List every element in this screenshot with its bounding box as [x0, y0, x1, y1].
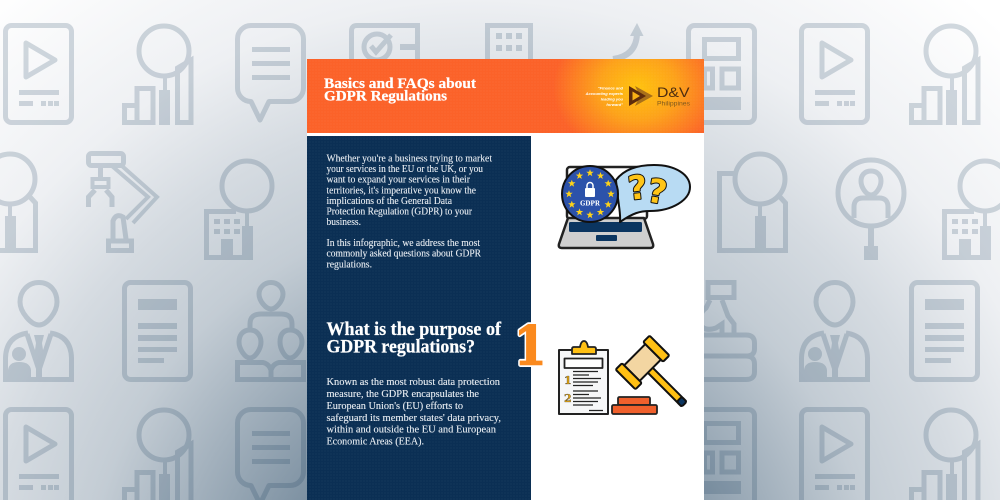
heading: question 1: GDPR regulations?	[326, 338, 475, 358]
icon: report bottom	[688, 410, 754, 500]
icon: video document bottom right	[802, 410, 868, 500]
question marks: ?	[645, 171, 670, 212]
icon: business person	[6, 282, 72, 380]
intro paragraph 1: territories, it's imperative you know the	[326, 186, 476, 196]
icon: magnifier box left	[0, 154, 36, 253]
icon: people group	[238, 282, 304, 380]
speech bubble	[616, 165, 690, 222]
keyboard	[569, 222, 642, 232]
tagline: Accounting experts	[585, 91, 624, 96]
intro paragraph 1	[326, 154, 492, 228]
intro paragraph 2: commonly asked questions about GDPR	[326, 248, 481, 260]
icon: magnifier chart	[124, 26, 191, 125]
laptop screen	[567, 167, 647, 219]
laptop base	[559, 218, 653, 248]
heading: question 1: What is the purpose of	[326, 320, 502, 340]
big number 1: 1	[514, 315, 546, 377]
icon: video document	[6, 26, 72, 122]
question marks: ?	[626, 167, 649, 208]
badge text: GDPR	[580, 200, 601, 208]
panel: orange header	[307, 59, 704, 133]
icon: robot arm	[88, 154, 157, 250]
icon: check list	[352, 26, 418, 60]
logo mark	[629, 86, 653, 106]
icon: speech bubble	[238, 26, 304, 120]
icon: business person right	[802, 282, 868, 380]
answer paragraph: European Union's (EU) efforts to	[326, 401, 463, 412]
icon: speech bubble bottom	[238, 410, 304, 500]
icon: laptop with GDPR badge and question bubble	[559, 165, 690, 248]
intro paragraph 1: Protection Regulation (GDPR) to your	[326, 206, 473, 218]
heading: question 1	[326, 320, 502, 358]
icon: document	[124, 282, 190, 380]
question marks	[626, 167, 670, 212]
title: Basics and FAQs about	[324, 76, 476, 92]
title	[324, 76, 476, 104]
answer paragraph: within and outside the EU and European	[326, 424, 496, 436]
tagline	[585, 86, 624, 107]
logo wordmark	[657, 84, 690, 108]
icon: video document bottom	[6, 410, 72, 500]
intro paragraph 2	[326, 238, 481, 270]
answer paragraph: Economic Areas (EEA).	[326, 436, 424, 448]
panel: white page	[307, 59, 704, 500]
icon: gavel and sound block	[612, 336, 701, 421]
intro paragraph 1: want to expand your services in their	[326, 174, 471, 186]
infographic page	[307, 59, 704, 500]
padlock	[585, 182, 595, 197]
answer paragraph: Known as the most robust data protection	[326, 377, 500, 388]
tagline: leading you	[601, 96, 624, 102]
icon: building	[488, 26, 530, 59]
icon: person magnifier	[838, 160, 904, 260]
icon: magnifier box right	[720, 154, 786, 253]
answer paragraph	[326, 377, 501, 448]
icon: magnifier chart bottom	[124, 410, 191, 500]
icon: magnifier chart bottom right	[912, 410, 978, 500]
icon: magnifier chart right	[912, 26, 978, 125]
icon: clipboard checklist: 1	[564, 374, 572, 387]
icon: building magnifier	[206, 161, 272, 260]
big number 1: 1	[514, 315, 546, 377]
intro paragraph 1: your services in the EU or the UK, or you	[326, 164, 483, 175]
answer paragraph: measure, the GDPR encapsulates the	[326, 389, 479, 400]
logo wordmark: Philippines	[657, 102, 690, 108]
icon: document right	[912, 282, 978, 380]
answer paragraph: safeguard its member states' data privacy,	[326, 413, 501, 424]
icon: video document right	[802, 26, 868, 122]
icon: hand and wallet	[696, 282, 754, 380]
tagline: "Finance and	[598, 86, 624, 90]
title: GDPR Regulations	[324, 88, 447, 104]
logo wordmark: D&V	[657, 84, 690, 100]
panel: navy column	[307, 136, 531, 500]
icon: clipboard checklist: 2	[564, 392, 572, 405]
icon: curved arrow	[613, 23, 644, 59]
icon: report left of video	[688, 26, 754, 122]
icon: clipboard checklist	[559, 341, 608, 414]
intro paragraph 1: business.	[326, 217, 361, 228]
icon: building magnifier right	[944, 161, 1000, 260]
intro paragraph 1: implications of the General Data	[326, 196, 452, 207]
intro paragraph 2: regulations.	[326, 260, 372, 270]
tagline: forward"	[606, 102, 623, 107]
intro paragraph 2: In this infographic, we address the most	[326, 238, 480, 249]
intro paragraph 1: Whether you're a business trying to market	[326, 154, 492, 164]
trackpad	[596, 235, 617, 241]
